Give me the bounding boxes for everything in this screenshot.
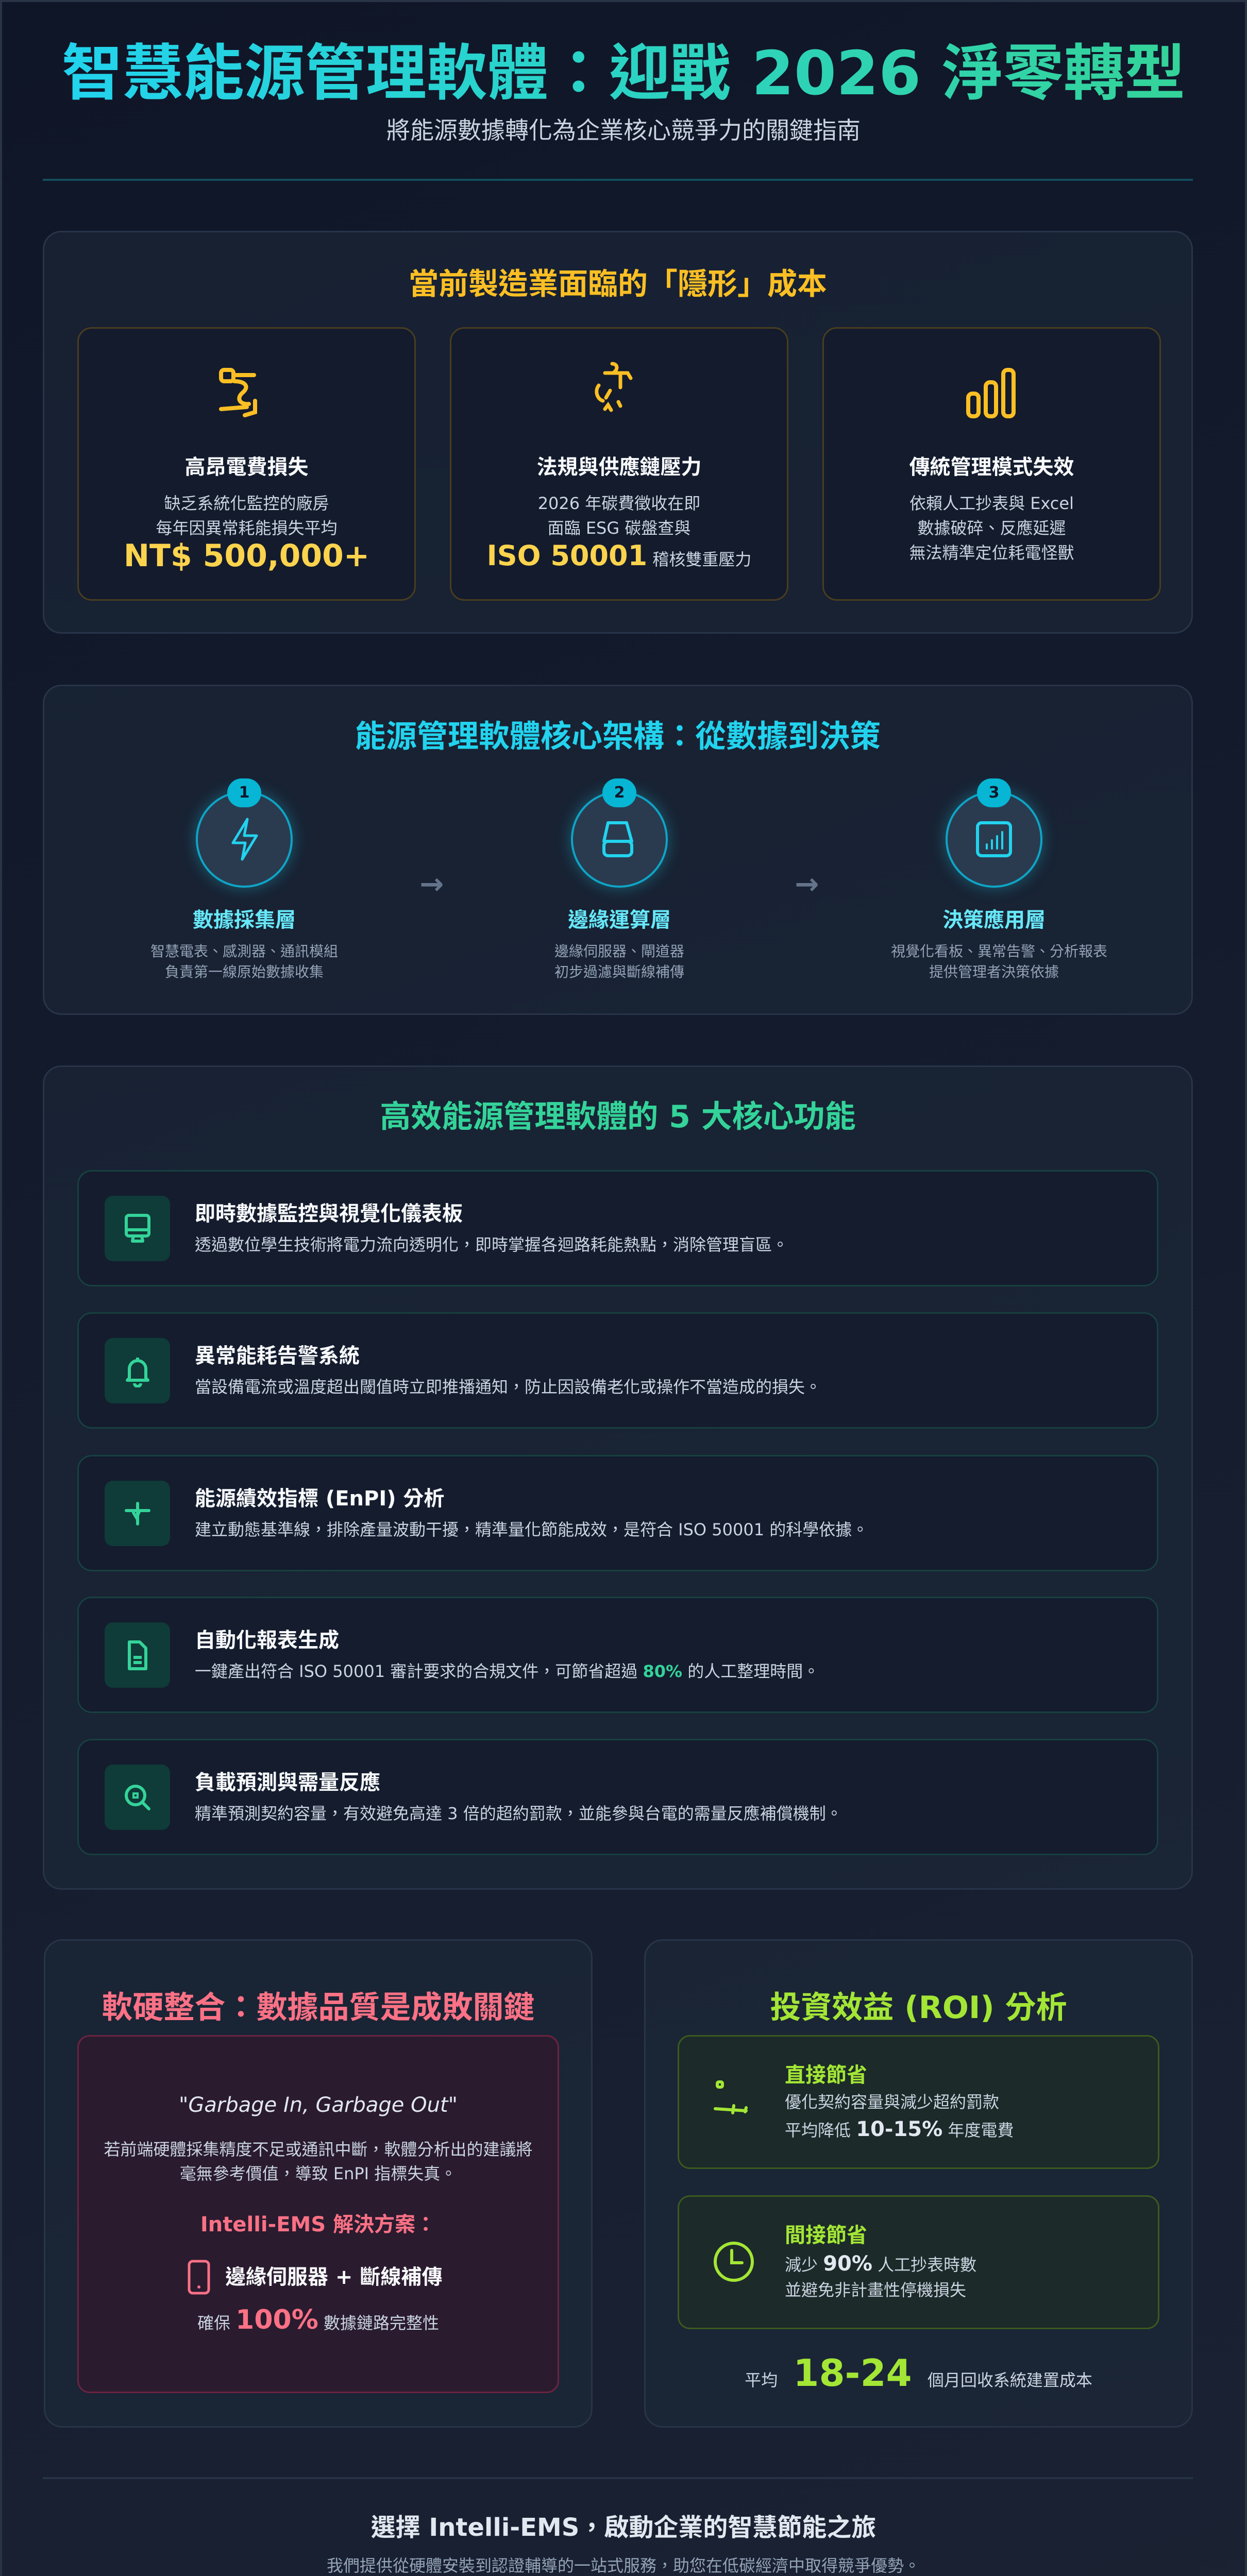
feature 5: 負載預測與需量反應: [195, 1771, 380, 1794]
icon: dashboard circle: [946, 791, 1042, 888]
feature 4: [77, 1597, 1158, 1713]
step 3: decision: 提供管理者決策依據: [929, 963, 1059, 980]
heading: ROI: 投資效益 (ROI) 分析: [770, 1990, 1067, 2026]
badge 2: 2: [614, 784, 625, 802]
heading: architecture: 能源管理軟體核心架構：從數據到決策: [355, 719, 881, 755]
sub-card: traditional management: 無法精準定位耗電怪獸: [909, 543, 1074, 563]
callout box: "Garbage In, Garbage Out": [179, 2093, 458, 2117]
feature 4: 一鍵產出符合 ISO 50001 審計要求的合規文件，可節省超過 80% 的人工整理時間。: [195, 1662, 819, 1681]
icon: pulse: [105, 1481, 170, 1546]
sub-card: regulation pressure: ISO 50001 稽核雙重壓力: [487, 539, 751, 572]
step 1: data collection: 負責第一線原始數據收集: [165, 963, 324, 980]
box: indirect savings: 並避免非計畫性停機損失: [785, 2280, 966, 2300]
feature 2: 當設備電流或溫度超出閾值時立即推播通知，防止因設備老化或操作不當造成的損失。: [195, 1377, 821, 1397]
step 1: data collection: 智慧電表、感測器、通訊模組: [150, 943, 338, 960]
icon: document: [105, 1622, 170, 1688]
arrow 2: →: [795, 868, 819, 901]
sub-card: regulation pressure: 面臨 ESG 碳盤查與: [548, 518, 690, 538]
heading: data quality: 軟硬整合：數據品質是成敗關鍵: [102, 1990, 535, 2026]
heading: features: 高效能源管理軟體的 5 大核心功能: [380, 1099, 856, 1135]
sub-card: traditional management: 數據破碎、反應延遲: [917, 518, 1066, 538]
sub-card: traditional management: 依賴人工抄表與 Excel: [909, 494, 1074, 513]
arrow 1: →: [420, 868, 444, 901]
sub-card: electricity loss: 每年因異常耗能損失平均: [156, 518, 337, 538]
feature 5: [77, 1739, 1158, 1855]
feature 3: 能源績效指標 (EnPI) 分析: [195, 1487, 444, 1511]
step 2: edge computing: [554, 778, 684, 980]
badge 1: 1: [239, 784, 249, 802]
icon: bar chart: [966, 368, 1016, 418]
step 3: decision: 決策應用層: [942, 908, 1046, 932]
text: traditional management: 傳統管理模式失效: [909, 455, 1074, 479]
footer heading: 選擇 Intelli-EMS，啟動企業的智慧節能之旅: [371, 2513, 876, 2542]
sub-card: regulation pressure: 2026 年碳費徵收在即: [538, 494, 700, 513]
step 3: decision: [891, 778, 1107, 980]
sub-card: electricity loss: [77, 327, 416, 601]
step 2: edge computing: 邊緣伺服器、閘道器: [554, 943, 684, 960]
icon: scale: [595, 362, 633, 412]
badge 3: 3: [989, 784, 999, 802]
badge 3: [977, 778, 1011, 807]
title: 智慧能源管理軟體：迎戰 2026 淨零轉型: [62, 38, 1185, 109]
icon: monitor: [105, 1196, 170, 1261]
step 2: edge computing: 初步過濾與斷線補傳: [554, 963, 684, 980]
feature 5: 精準預測契約容量，有效避免高達 3 倍的超約罰款，並能參與台電的需量反應補償機制。: [195, 1804, 842, 1823]
icon: lightning circle: [196, 791, 293, 888]
feature 4: 自動化報表生成: [195, 1629, 339, 1652]
panel: ROI: [644, 1939, 1193, 2428]
badge 1: [227, 778, 261, 807]
feature 1: 透過數位學生技術將電力流向透明化，即時掌握各迴路耗能熱點，消除管理盲區。: [195, 1235, 788, 1255]
feature 3: [77, 1455, 1158, 1571]
icon: clock: [714, 2242, 754, 2282]
callout box: 若前端硬體採集精度不足或通訊中斷，軟體分析出的建議將: [104, 2140, 533, 2159]
box: direct savings: 平均降低 10-15% 年度電費: [785, 2117, 1014, 2141]
step 1: data collection: [150, 778, 338, 980]
panel: 5 core features: [43, 1065, 1193, 1890]
box: direct savings: 直接節省: [785, 2063, 867, 2087]
feature 1: [77, 1170, 1158, 1286]
box: indirect savings: 間接節省: [785, 2224, 867, 2247]
callout box: 確保 100% 數據鏈路完整性: [197, 2304, 439, 2335]
icon: server circle: [571, 791, 668, 888]
heading: hidden costs: 當前製造業面臨的「隱形」成本: [409, 266, 827, 301]
step 3: decision: 視覺化看板、異常告警、分析報表: [891, 943, 1107, 960]
icon: phone + solution: 邊緣伺服器 + 斷線補傳: [225, 2265, 442, 2289]
icon: search: [105, 1765, 170, 1830]
box: direct savings: [678, 2035, 1159, 2169]
callout box: 毫無參考價值，導致 EnPI 指標失真。: [180, 2164, 457, 2183]
box: direct savings: 優化契約容量與減少超約罰款: [785, 2092, 999, 2112]
icon: bell: [105, 1338, 170, 1403]
feature 2: [77, 1312, 1158, 1429]
feature 3: 建立動態基準線，排除產量波動干擾，精準量化節能成效，是符合 ISO 50001 的科學依據。: [195, 1520, 868, 1539]
callout box: [77, 2035, 559, 2393]
subtitle: 將能源數據轉化為企業核心競爭力的關鍵指南: [386, 116, 861, 144]
payback period: 平均 18-24 個月回收系統建置成本: [745, 2351, 1092, 2395]
step 2: edge computing: 邊緣運算層: [568, 908, 671, 932]
icon: phone + solution: [188, 2260, 442, 2295]
callout box: Intelli-EMS 解決方案：: [200, 2213, 436, 2236]
text: electricity loss: 高昂電費損失: [184, 455, 308, 479]
box: indirect savings: 減少 90% 人工抄表時數: [785, 2252, 976, 2276]
feature 2: 異常能耗告警系統: [195, 1344, 360, 1368]
icon: direct savings: [714, 2080, 748, 2114]
panel: architecture: [43, 685, 1193, 1015]
panel: data quality: [44, 1939, 593, 2428]
footer subtext: 我們提供從硬體安裝到認證輔導的一站式服務，助您在低碳經濟中取得競爭優勢。: [327, 2556, 920, 2575]
icon: plug: [219, 368, 257, 417]
feature 1: 即時數據監控與視覺化儀表板: [195, 1202, 463, 1226]
box: indirect savings: [678, 2195, 1159, 2329]
sub-card: electricity loss: NT$ 500,000+: [124, 538, 369, 574]
sub-card: electricity loss: 缺乏系統化監控的廠房: [164, 494, 329, 513]
sub-card: traditional management: [822, 327, 1161, 601]
panel: hidden costs: [43, 231, 1193, 634]
sub-card: regulation pressure: [450, 327, 788, 601]
step 1: data collection: 數據採集層: [193, 908, 296, 932]
badge 2: [602, 778, 636, 807]
text: regulation pressure: 法規與供應鏈壓力: [537, 455, 702, 479]
